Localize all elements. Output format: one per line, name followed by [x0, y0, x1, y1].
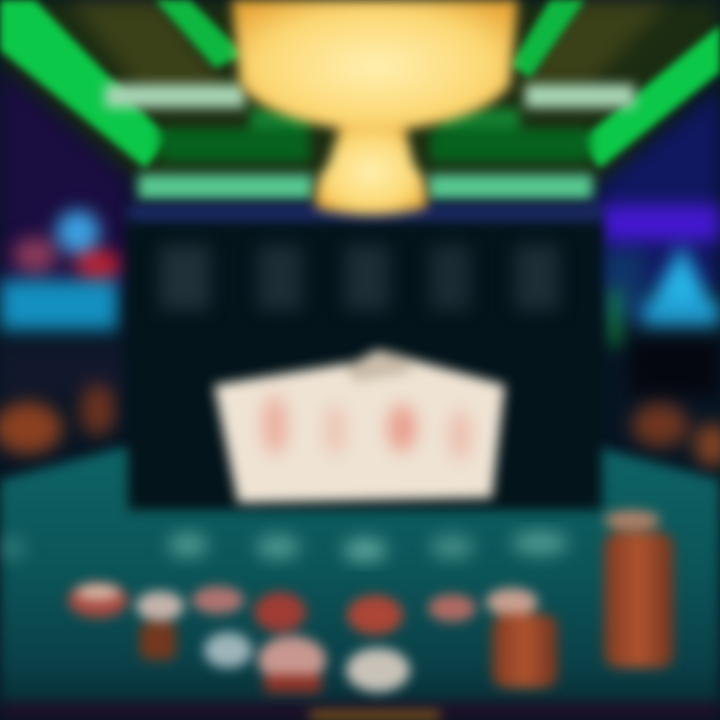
green neon beams	[0, 0, 720, 168]
ceiling	[0, 0, 720, 290]
side crowd left	[0, 210, 125, 454]
playing cards	[214, 350, 505, 503]
dark display board	[128, 205, 602, 510]
chandelier	[232, 0, 518, 215]
card pips	[263, 395, 470, 461]
side crowd right	[600, 205, 720, 467]
table	[0, 448, 720, 720]
board columns	[160, 245, 559, 310]
poker chips	[68, 510, 674, 693]
table markings	[0, 531, 568, 562]
green and white ceiling bands	[105, 84, 635, 200]
